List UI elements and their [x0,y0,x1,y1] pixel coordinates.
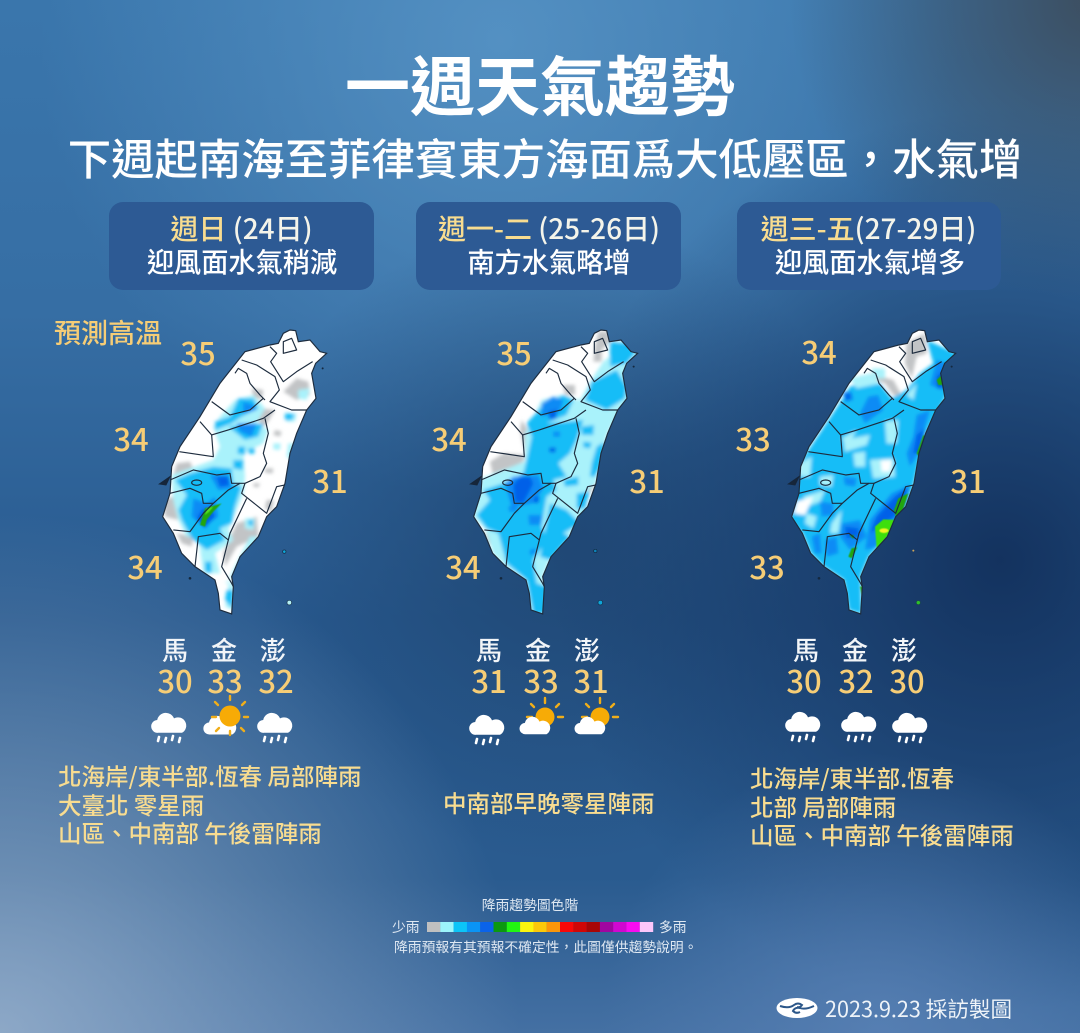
text block: Wednesday-Friday forecast: 山區、中南部 午後雷陣雨 [750,817,1014,851]
legend: rainfall colour scale: 降雨趨勢圖色階 [482,894,578,914]
legend: rainfall colour scale: 降雨預報有其預報不確定性，此圖僅供趨勢說明。 [394,936,698,956]
legend: rainfall colour scale: 少雨 [392,916,420,936]
icon: sun and cloud [520,698,563,734]
outlying islands: Monday-Tuesday: 33 [523,657,559,702]
outlying islands: Wednesday-Friday: 金 [842,631,868,668]
icon: rain cloud [469,715,504,744]
map: Monday-Tuesday rainfall [470,330,640,614]
icon: rain cloud [151,713,186,742]
temperatures: Sunday map: 31 [312,457,348,502]
outlying islands: Monday-Tuesday: 31 [573,657,609,702]
icon: sun and cloud [575,698,618,734]
temperatures: Sunday map [113,329,348,588]
outlying islands: Sunday [157,631,294,702]
outlying islands: Sunday: 金 [211,631,237,668]
outlying islands: Wednesday-Friday [786,631,925,702]
temperatures: Monday-Tuesday map: 31 [629,457,665,502]
panel: Sunday header: 週日 (24日) [170,208,313,248]
panel: Sunday header [109,202,374,290]
outlying islands: Sunday: 33 [207,657,243,702]
outlying islands: Sunday: 32 [258,657,294,702]
logo: agency emblem [776,998,818,1018]
temperatures: Sunday map: 35 [180,329,216,374]
outlying islands: Monday-Tuesday: 澎 [574,631,600,668]
outlying islands: Sunday: 澎 [260,631,286,668]
legend: rainfall colour scale [392,894,698,956]
outlying islands: Wednesday-Friday: 馬 [793,631,819,668]
temperatures: Wednesday-Friday map: 33 [749,543,785,588]
text block: Wednesday-Friday forecast [750,760,1014,851]
temperatures: Monday-Tuesday map: 34 [431,415,467,460]
temperatures: Sunday map: 34 [113,415,149,460]
outlying islands: Wednesday-Friday: 32 [838,657,874,702]
subtitle: 下週起南海至菲律賓東方海面爲大低壓區，水氣增 [68,126,1022,188]
outlying islands: Wednesday-Friday: 30 [889,657,925,702]
title: 一週天氣趨勢 [345,35,735,129]
text block: Wednesday-Friday forecast: 北海岸/東半部.恆春 [750,760,954,794]
map: Sunday rainfall [159,330,327,614]
text block: Wednesday-Friday forecast: 北部 局部陣雨 [750,789,896,823]
temperatures: Monday-Tuesday map [431,329,665,588]
temperatures: Wednesday-Friday map: 34 [801,328,837,373]
icon: rain cloud [892,713,927,742]
panel: Wednesday-Friday header [737,202,1001,290]
outlying islands: Wednesday-Friday: 30 [786,657,822,702]
temperatures: Monday-Tuesday map: 35 [496,329,532,374]
panel: Wednesday-Friday header: 迎風面水氣增多 [775,240,965,280]
outlying islands: Monday-Tuesday: 馬 [476,631,502,668]
text block: Monday-Tuesday forecast: 中南部早晚零星陣雨 [443,785,654,819]
outlying islands: Monday-Tuesday [471,631,609,702]
icon: rain cloud [257,713,292,742]
outlying islands: Sunday: 30 [157,657,193,702]
text block: Sunday forecast: 山區、中南部 午後雷陣雨 [58,815,322,849]
label: forecast high temperature: 預測高溫 [54,312,162,351]
temperatures: Wednesday-Friday map [735,328,986,588]
panel: Monday-Tuesday header: 週一-二 (25-26日) [438,208,660,248]
temperatures: Wednesday-Friday map: 31 [950,457,986,502]
panel: Sunday header: 迎風面水氣稍減 [147,240,337,280]
outlying islands: Monday-Tuesday: 金 [525,631,551,668]
panel: Monday-Tuesday header [416,202,681,290]
panel: Monday-Tuesday header: 南方水氣略增 [467,240,631,280]
credit line: 2023.9.23 採訪製圖 [825,993,1012,1024]
temperatures: Wednesday-Friday map: 33 [735,415,771,460]
outlying islands: Monday-Tuesday: 31 [471,657,507,702]
icon: rain cloud [785,712,820,741]
panel: Wednesday-Friday header: 週三-五(27-29日) [761,208,976,248]
legend: rainfall colour scale: 多雨 [659,916,687,936]
outlying islands: Wednesday-Friday: 澎 [891,631,917,668]
text block: Sunday forecast: 大臺北 零星雨 [58,787,204,821]
temperatures: Monday-Tuesday map: 34 [445,543,481,588]
temperatures: Sunday map: 34 [127,543,163,588]
map: Wednesday-Friday rainfall [788,330,957,614]
text block: Sunday forecast: 北海岸/東半部.恆春 局部陣雨 [58,758,361,792]
icon: sun and cloud [203,696,248,735]
text block: Sunday forecast [58,758,361,849]
outlying islands: Sunday: 馬 [162,631,188,668]
icon: rain cloud [841,712,876,741]
